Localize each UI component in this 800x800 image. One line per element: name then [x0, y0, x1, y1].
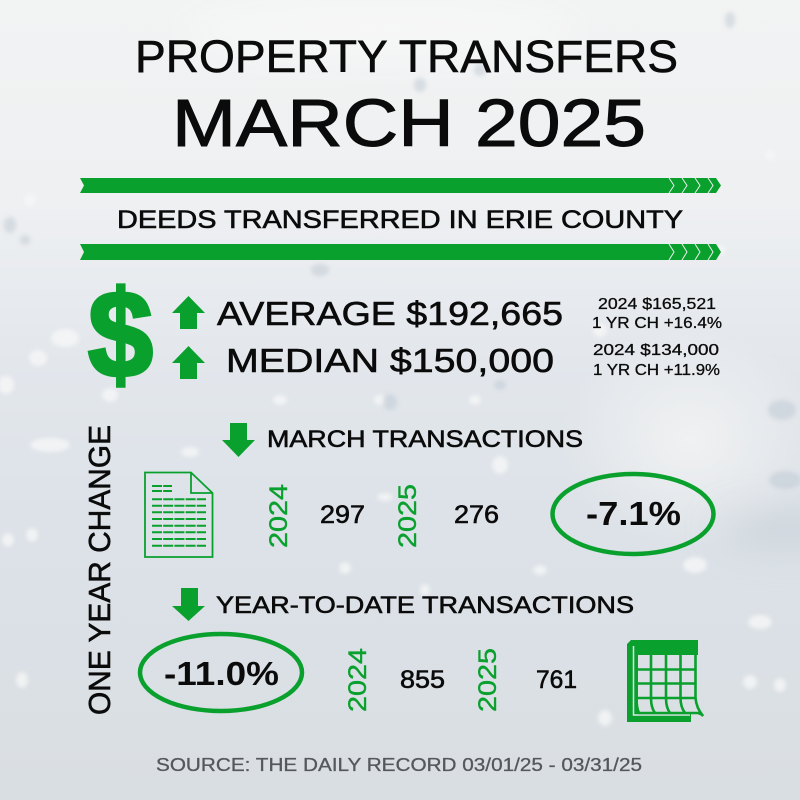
icon: average up arrow: [172, 296, 205, 329]
icon: dollar sign: $: [88, 267, 153, 404]
median comparison: [593, 342, 720, 379]
march 2024 value: 297: [320, 501, 365, 529]
icon: march down arrow: [222, 423, 255, 457]
icon: document: [145, 472, 212, 557]
callout: march change: [552, 474, 714, 554]
title line: property transfers: PROPERTY TRANSFERS: [135, 31, 678, 82]
heading: year-to-date transactions: YEAR-TO-DATE TRANSACTIONS: [216, 592, 634, 619]
ytd 2024 label: 2024: [344, 648, 372, 712]
ytd 2024 value: 855: [400, 666, 445, 694]
median comparison: 1 YR CH +11.9%: [593, 362, 720, 379]
icon: ytd down arrow: [172, 588, 205, 621]
banner: top green arrow bar: [80, 178, 721, 193]
ytd 2025 label: 2025: [474, 648, 502, 712]
callout: ytd change: -11.0%: [164, 655, 279, 692]
march 2025 label: 2025: [394, 484, 422, 548]
average comparison: 1 YR CH +16.4%: [592, 315, 722, 332]
average price: AVERAGE $192,665: [217, 295, 563, 332]
march 2024 label: 2024: [265, 484, 293, 548]
callout: ytd change: [140, 634, 302, 711]
median price: MEDIAN $150,000: [226, 342, 554, 379]
average comparison: [592, 296, 722, 332]
subtitle: march 2025: MARCH 2025: [172, 86, 646, 161]
median comparison: 2024 $134,000: [593, 342, 719, 359]
ytd 2025 value: 761: [536, 666, 577, 694]
march 2025 value: 276: [454, 501, 499, 529]
banner: bottom green arrow bar: [80, 244, 721, 260]
source line: SOURCE: THE DAILY RECORD 03/01/25 - 03/31/25: [156, 754, 642, 775]
callout: march change: -7.1%: [586, 495, 681, 532]
icon: calendar: [627, 640, 703, 722]
heading: march transactions: MARCH TRANSACTIONS: [267, 426, 583, 453]
banner heading: DEEDS TRANSFERRED IN ERIE COUNTY: [117, 206, 683, 234]
average comparison: 2024 $165,521: [598, 296, 716, 313]
vertical label: one year change: ONE YEAR CHANGE: [82, 425, 117, 715]
icon: median up arrow: [172, 346, 205, 379]
